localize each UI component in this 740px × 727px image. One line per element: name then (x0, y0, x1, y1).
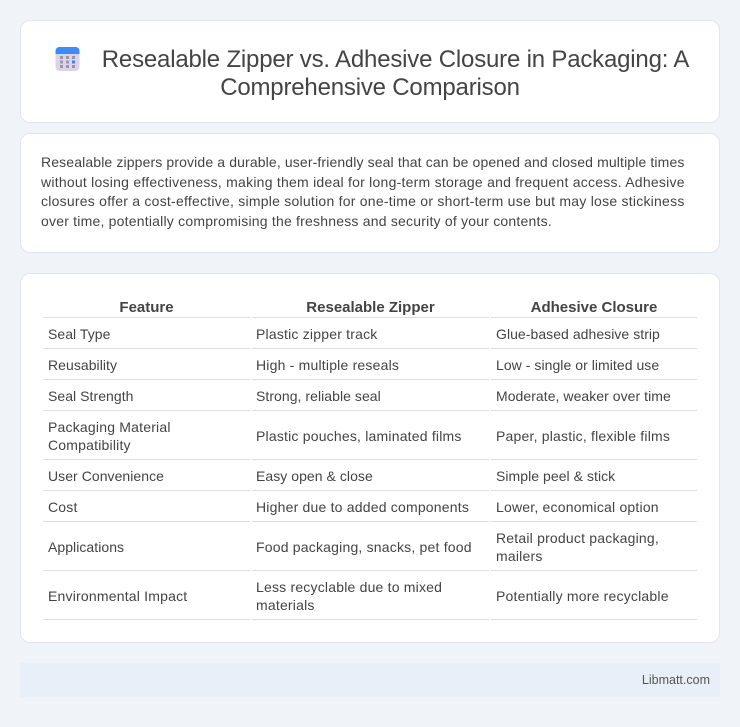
row: reusability: High - multiple reseals (256, 357, 399, 373)
row: cost: Cost (48, 499, 78, 515)
title: Comprehensive Comparison (220, 74, 520, 101)
row: reusability: Low - single or limited use (496, 357, 659, 373)
row: seal type: Seal Type (48, 326, 110, 342)
row: applications: Applications (48, 539, 124, 555)
row: environmental impact: Environmental Impact (48, 588, 187, 604)
footer text: Libmatt.com (642, 673, 710, 687)
row: applications: Food packaging, snacks, pet food (256, 539, 472, 555)
row: user convenience: Simple peel & stick (496, 468, 615, 484)
row: cost (48, 499, 659, 515)
row: seal strength: Strong, reliable seal (256, 388, 381, 404)
row: seal type (48, 326, 660, 342)
icon: calendar grid (56, 47, 80, 71)
row: seal type: Plastic zipper track (256, 326, 377, 342)
row: reusability: Reusability (48, 357, 117, 373)
footer bar (20, 663, 720, 697)
row: packaging material compatibility: Compatibility (48, 437, 131, 453)
intro panel (20, 133, 720, 253)
row: seal strength: Moderate, weaker over time (496, 388, 671, 404)
row: user convenience (48, 468, 616, 484)
row: user convenience: User Convenience (48, 468, 164, 484)
row: environmental impact: materials (256, 597, 315, 613)
table header row: Resealable Zipper (306, 299, 435, 316)
row: applications: Retail product packaging, (496, 530, 659, 546)
row: environmental impact: Less recyclable due to mixed (256, 579, 442, 595)
table header row: Adhesive Closure (531, 299, 657, 316)
row: seal type: Glue-based adhesive strip (496, 326, 660, 342)
table header row (119, 299, 657, 316)
intro paragraph: Resealable zippers provide a durable, user-friendly seal that can be opened and closed multiple times (41, 154, 684, 170)
row: seal strength (48, 388, 671, 404)
row: applications: mailers (496, 548, 543, 564)
row: environmental impact (48, 579, 669, 613)
row: user convenience: Easy open & close (256, 468, 373, 484)
header card (20, 20, 720, 123)
row: seal strength: Seal Strength (48, 388, 133, 404)
row: cost: Lower, economical option (496, 499, 659, 515)
row: packaging material compatibility (48, 419, 670, 453)
intro paragraph (41, 154, 685, 229)
row: applications (48, 530, 659, 564)
title (102, 46, 690, 101)
intro paragraph: over time, potentially compromising the freshness and security of your contents. (41, 213, 552, 229)
comparison table panel (20, 273, 720, 643)
intro paragraph: closures offer a cost-effective, simple solution for one-time or short-term use but may lose stickiness (41, 193, 685, 209)
row: reusability (48, 357, 659, 373)
table header row: Feature (119, 299, 174, 316)
row: environmental impact: Potentially more recyclable (496, 588, 669, 604)
intro paragraph: without losing effectiveness, making them ideal for long-term storage and frequent access. Adhesive (41, 174, 685, 190)
title: Resealable Zipper vs. Adhesive Closure in Packaging: A (102, 46, 689, 73)
row: cost: Higher due to added components (256, 499, 469, 515)
row: packaging material compatibility: Paper, plastic, flexible films (496, 428, 670, 444)
row: packaging material compatibility: Plastic pouches, laminated films (256, 428, 462, 444)
row: packaging material compatibility: Packaging Material (48, 419, 171, 435)
